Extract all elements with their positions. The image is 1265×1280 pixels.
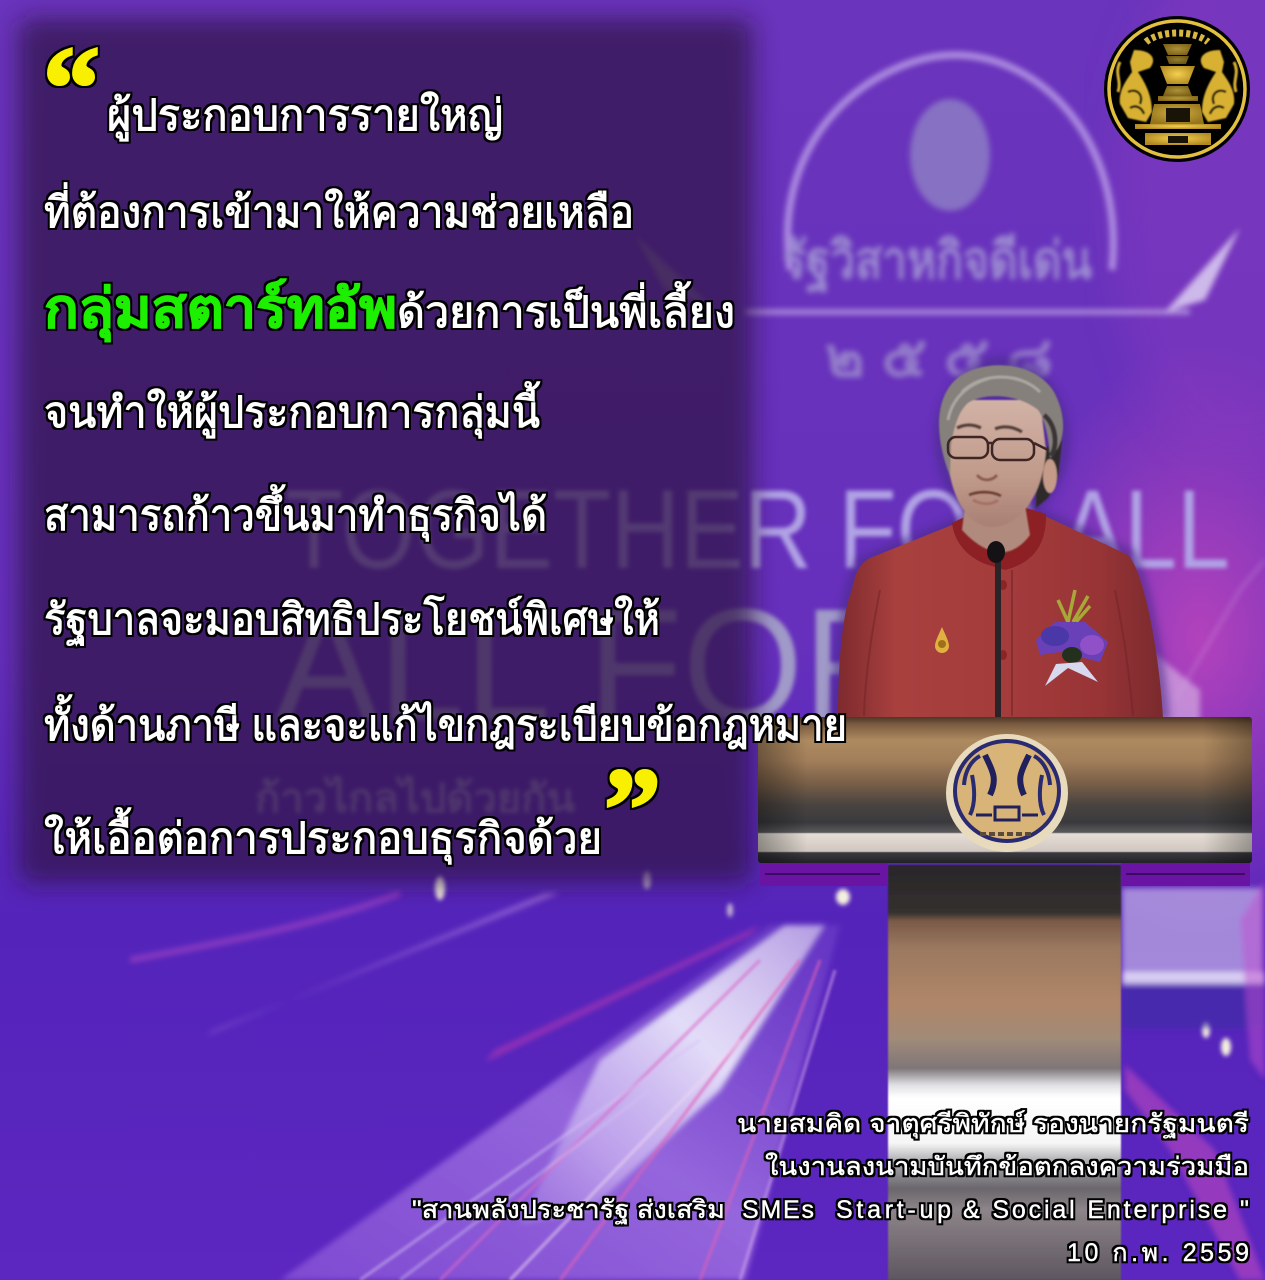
blurred stage logo xyxy=(635,55,1240,388)
quote line 4: จนทำให้ผู้ประกอบการกลุ่มนี้ xyxy=(44,381,540,439)
main quote xyxy=(43,22,847,875)
ray lines xyxy=(360,960,835,1280)
seal: lions xyxy=(1118,50,1236,122)
blurred stage logo: รัฐวิสาหกิจดีเด่น xyxy=(782,232,1092,294)
caption line 3: "สานพลังประชารัฐ ส่งเสริม xyxy=(412,1196,725,1224)
podium seal xyxy=(946,734,1068,852)
flower corsage xyxy=(1036,590,1108,686)
podium top xyxy=(758,717,1252,863)
caption line 3: Start-up xyxy=(836,1196,951,1224)
head and hair xyxy=(939,365,1063,552)
right side lights xyxy=(1122,560,1265,1280)
seal: central bowl xyxy=(1135,44,1221,145)
ray lights xyxy=(435,871,1231,1056)
quote line 8: ให้เอื้อต่อการประกอบธุรกิจด้วย xyxy=(44,807,602,865)
caption xyxy=(412,1110,1249,1267)
blurred stage logo: ๒ ๕ ๕ ๘ xyxy=(825,325,1053,388)
quote line 7: ทั้งด้านภาษี และจะแก้ไขกฎระเบียบข้อกฎหมาย xyxy=(44,694,847,750)
government seal logo xyxy=(1104,16,1250,162)
microphone xyxy=(987,541,1005,718)
presenter halo xyxy=(830,356,1170,720)
quote line 3 highlight: กลุ่มสตาร์ทอัพ xyxy=(44,278,397,343)
blurred event slogan xyxy=(255,467,1230,821)
jacket xyxy=(838,500,1163,718)
caption line 4: 10 ก.พ. 2559 xyxy=(1067,1239,1249,1267)
caption line 3 xyxy=(412,1196,1249,1224)
blurred event slogan: ก้าวไกลไปด้วยกัน xyxy=(255,775,575,821)
background light rays xyxy=(130,560,1265,1280)
opening quotation mark: “ xyxy=(43,22,100,153)
caption line 2: ในงานลงนามบันทึกข้อตกลงความร่วมมือ xyxy=(765,1152,1249,1181)
caption line 3: " xyxy=(1240,1196,1249,1224)
quote line 3: ด้วยการเป็นพี่เลี้ยง xyxy=(397,281,735,337)
caption line 3: & Social Enterprise xyxy=(963,1196,1227,1224)
quote line 1: ผู้ประกอบการรายใหญ่ xyxy=(107,91,503,142)
quote line 5: สามารถก้าวขึ้นมาทำธุรกิจได้ xyxy=(44,484,547,542)
lapel pin xyxy=(935,627,949,653)
glasses xyxy=(948,437,1048,460)
quote line 6: รัฐบาลจะมอบสิทธิประโยชน์พิเศษให้ xyxy=(44,595,660,645)
podium pedestal xyxy=(888,865,1121,1280)
dark quote panel xyxy=(18,18,753,884)
caption line 3: SMEs xyxy=(742,1196,814,1224)
blurred event slogan: ALL FOR xyxy=(275,575,915,754)
seal: rays xyxy=(1146,33,1208,42)
caption line 1: นายสมคิด จาตุศรีพิทักษ์ รองนายกรัฐมนตรี xyxy=(737,1110,1249,1139)
presenter at podium xyxy=(758,356,1252,1280)
ray fan xyxy=(130,893,840,1280)
closing quotation mark: ” xyxy=(604,744,661,875)
podium purple trim xyxy=(760,862,1250,886)
quote line 2: ที่ต้องการเข้ามาให้ความช่วยเหลือ xyxy=(44,183,634,237)
